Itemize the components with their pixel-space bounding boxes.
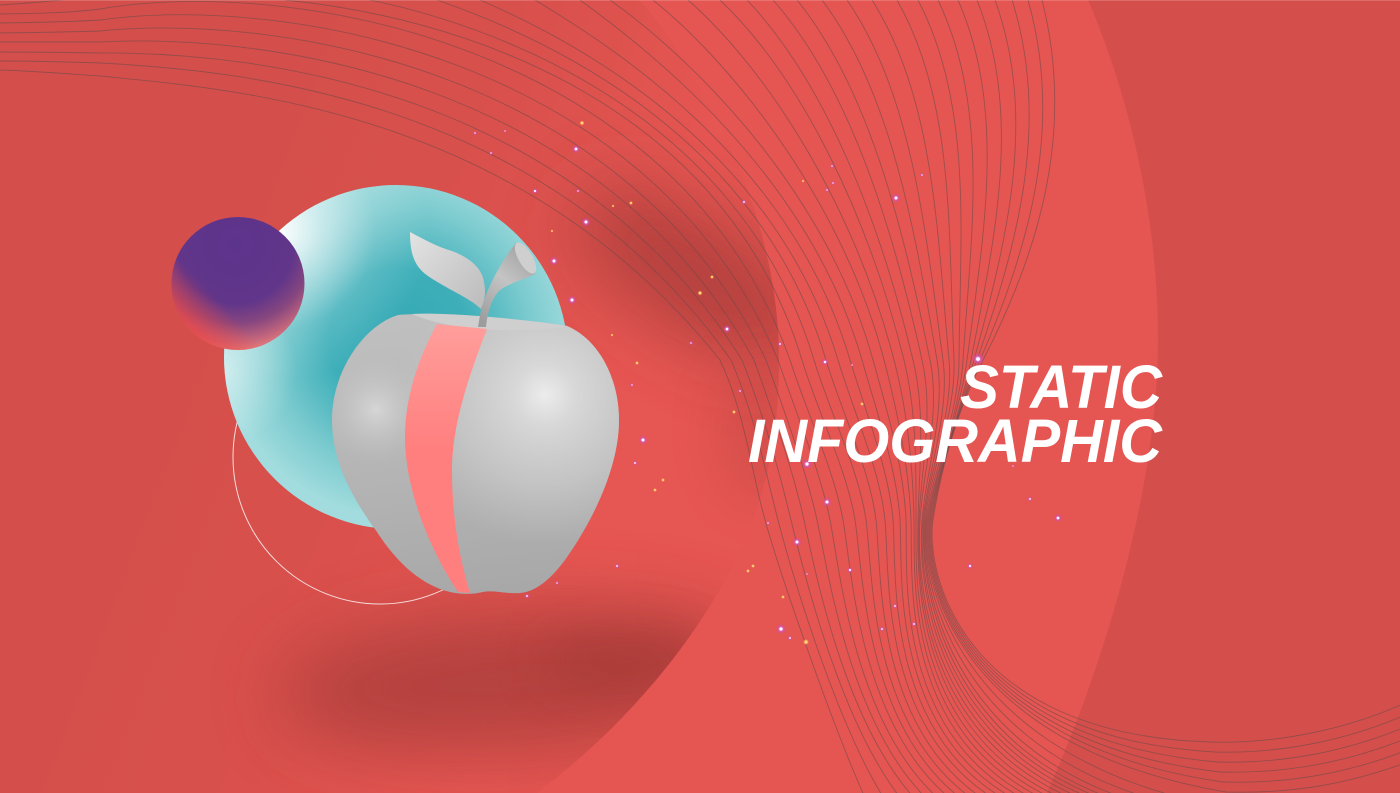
title [748,353,1163,475]
inner shaded disc [285,0,779,793]
purple sphere [172,217,304,350]
thin white ring [233,310,527,604]
frame edge highlight [0,0,1400,1]
apple coral stripe [405,324,487,593]
star particles [473,120,1062,645]
apple leaf [410,232,485,309]
apple stem [478,239,540,327]
title: INFOGRAPHIC [748,407,1163,475]
teal sphere [224,185,568,529]
title: STATIC [960,353,1163,421]
apple body [332,314,619,594]
apple [332,232,619,594]
light crescent band [520,0,1158,793]
